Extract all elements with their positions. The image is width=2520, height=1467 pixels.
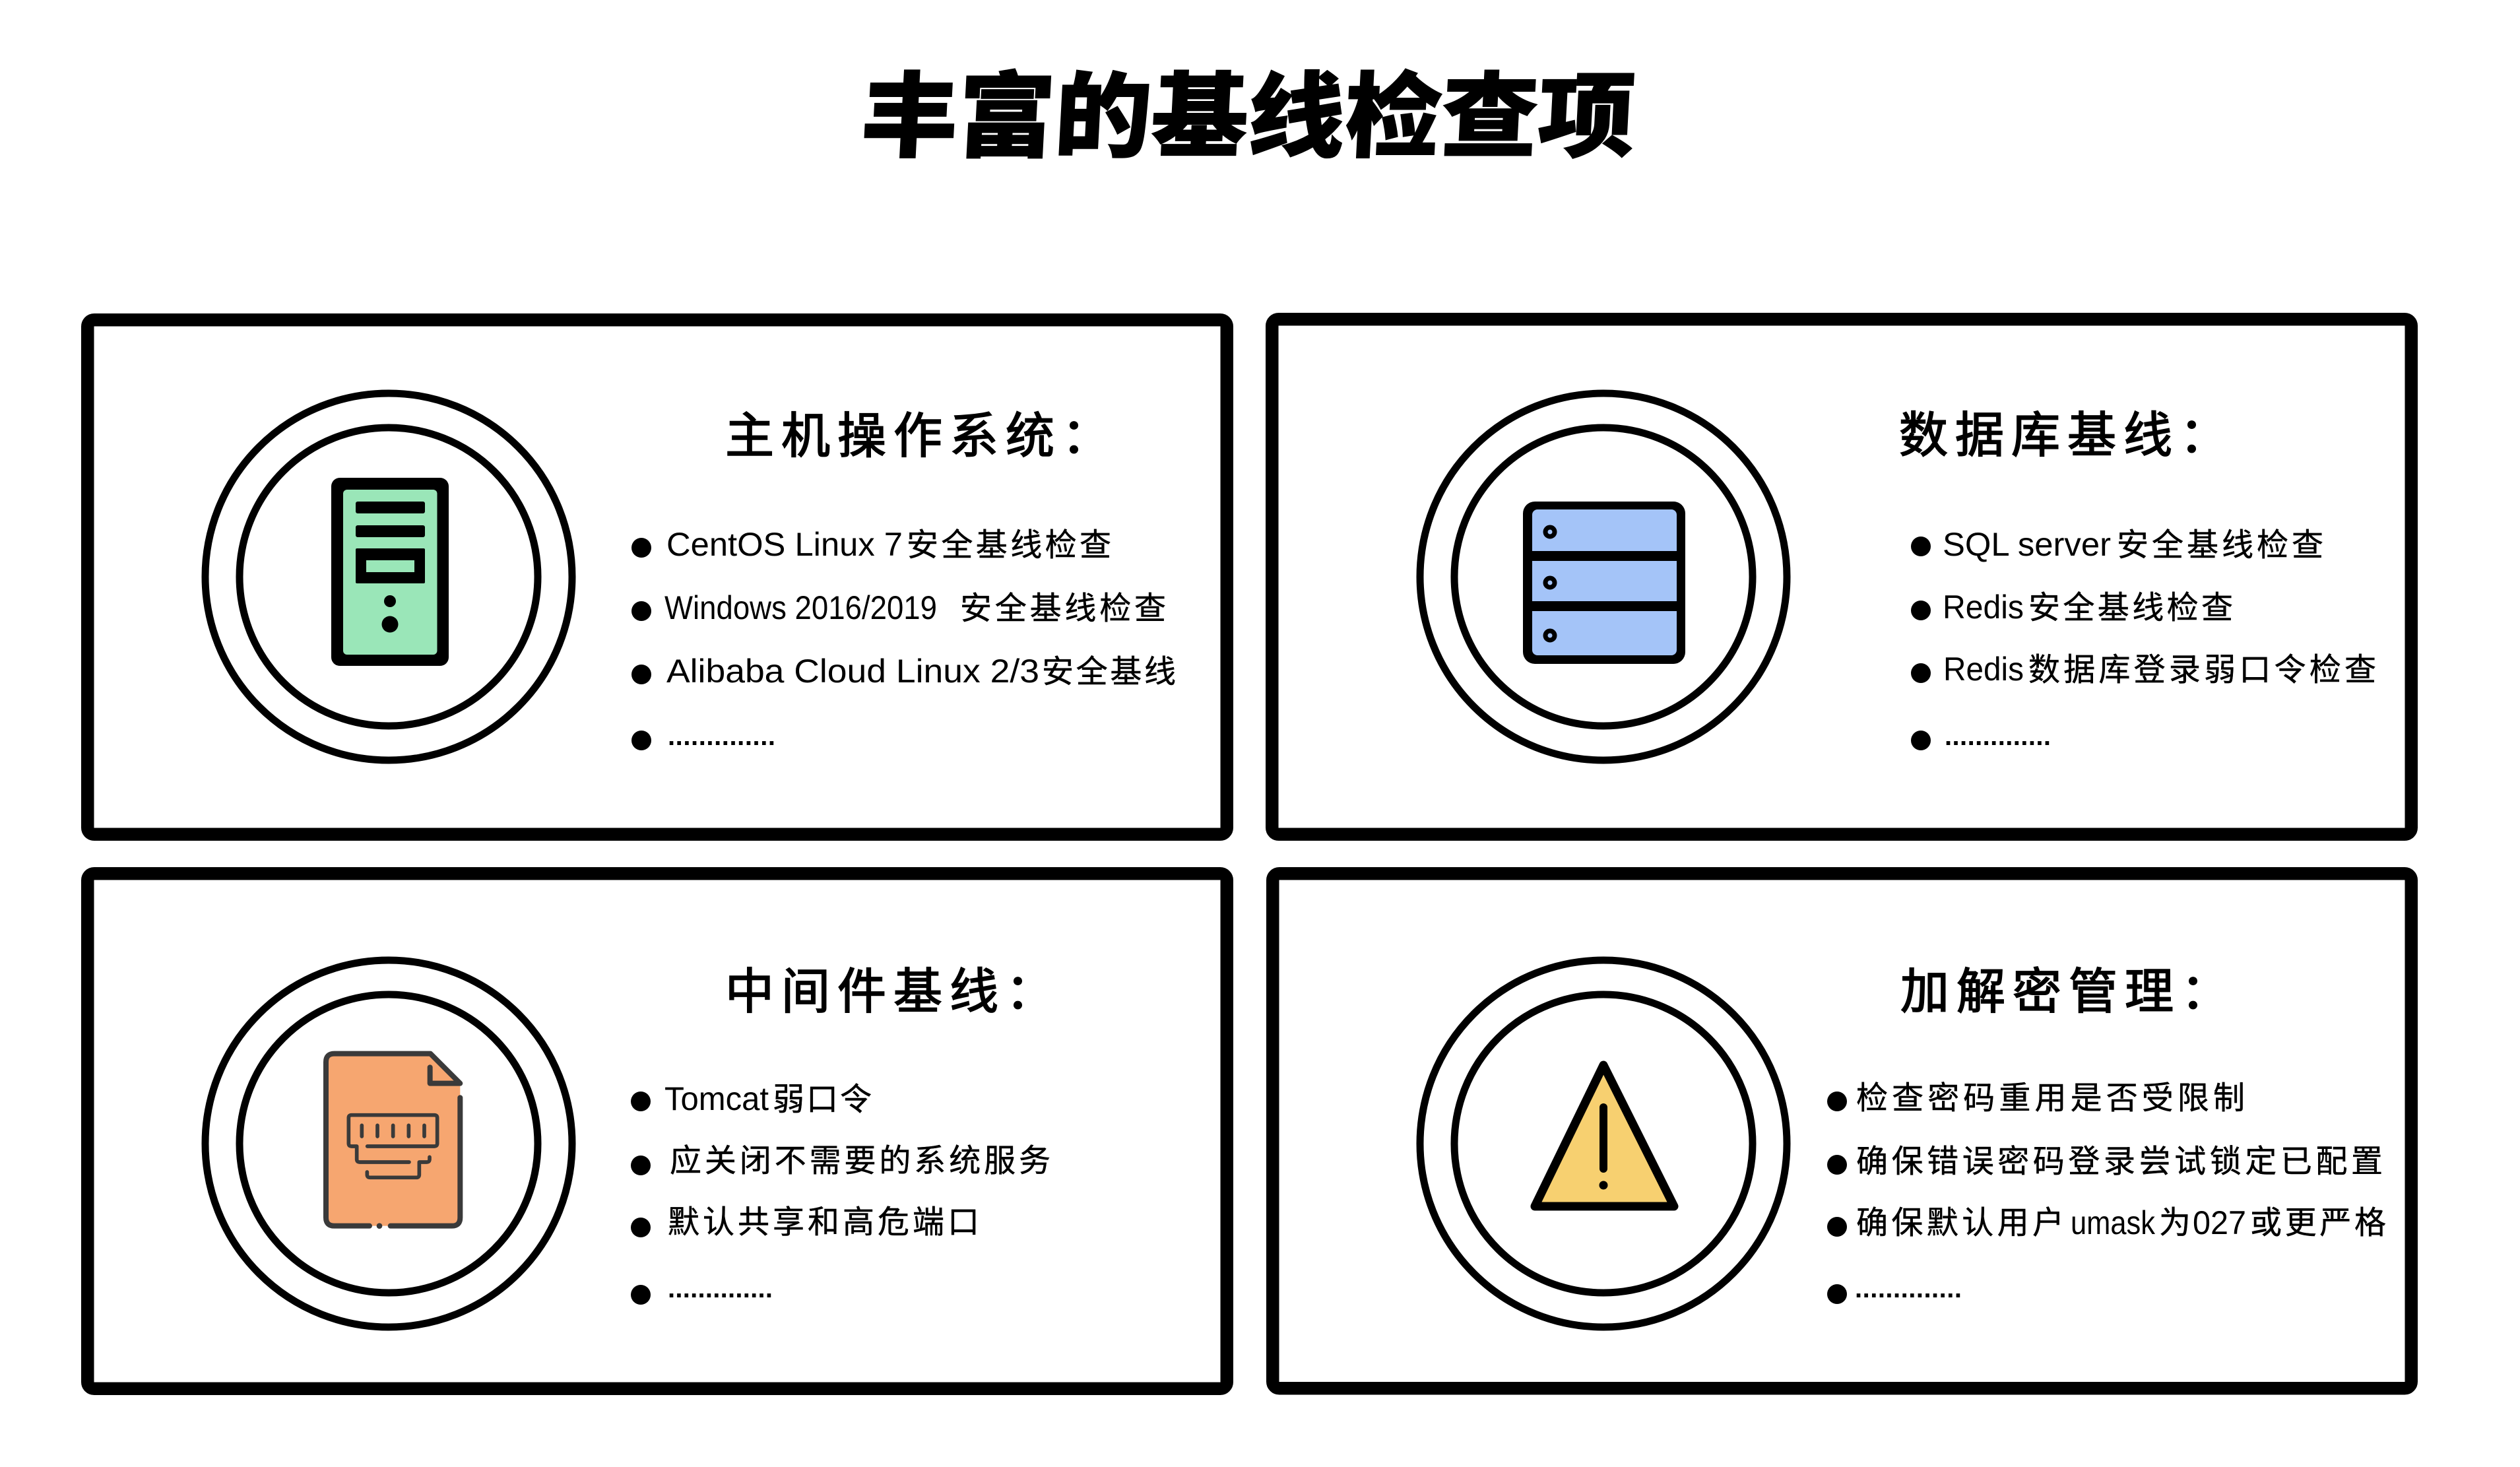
icon: computer tower bbox=[331, 478, 449, 666]
list item: Tomcat: Tomcat bbox=[664, 1080, 769, 1117]
list item: more: .............. bbox=[1945, 722, 2051, 751]
list item: SQL server bbox=[1911, 526, 2323, 563]
list item: more: .............. bbox=[668, 722, 775, 751]
list item: Redis weak password: Redis bbox=[1943, 651, 2024, 688]
heading: 加解密管理： bbox=[1900, 964, 2237, 1019]
panel: database baseline bbox=[1272, 319, 2411, 834]
concentric rings bbox=[205, 960, 572, 1327]
list item: Alibaba Cloud Linux: 安全基线 bbox=[1042, 655, 1176, 690]
list item: Redis baseline: Redis bbox=[1943, 589, 2024, 626]
panel: encryption management bbox=[1273, 874, 2411, 1388]
list item: umask: umask bbox=[2071, 1204, 2156, 1241]
list item: Redis baseline: 安全基线检查 bbox=[2028, 591, 2233, 626]
concentric rings bbox=[205, 393, 572, 760]
list item: CentOS: 安全基线检查 bbox=[907, 528, 1111, 563]
list item: Alibaba Cloud Linux bbox=[631, 653, 1176, 690]
list item: umask: 027 bbox=[2193, 1204, 2246, 1241]
concentric rings bbox=[1420, 960, 1787, 1327]
list item: SQL server: SQL server bbox=[1943, 526, 2111, 563]
list item: password reuse: 检查密码重用是否受限制 bbox=[1856, 1081, 2245, 1116]
list item: Windows bbox=[631, 589, 1166, 626]
list item: umask: 确保默认用户 bbox=[1856, 1206, 2064, 1241]
heading: 数据库基线： bbox=[1899, 408, 2236, 463]
list item: login lockout: 确保错误密码登录尝试锁定已配置 bbox=[1856, 1144, 2383, 1179]
list item: default shares and ports: 默认共享和高危端口 bbox=[668, 1205, 979, 1240]
heading: 中间件基线： bbox=[725, 964, 1062, 1019]
list item: Alibaba Cloud Linux: Alibaba Cloud Linux 2/3 bbox=[666, 653, 1039, 690]
list item: CentOS bbox=[631, 526, 1111, 563]
list item: Redis weak password: 数据库登录弱口令检查 bbox=[2028, 653, 2376, 688]
list item: Windows: Windows 2016/2019 bbox=[664, 589, 937, 626]
concentric rings bbox=[1420, 393, 1787, 760]
list item: umask bbox=[1827, 1204, 2386, 1241]
list item: Windows: 安全基线检查 bbox=[960, 591, 1166, 626]
panel: middleware baseline bbox=[88, 874, 1227, 1388]
list item: more: .............. bbox=[1855, 1274, 1962, 1303]
list item: umask: 或更严格 bbox=[2250, 1206, 2386, 1241]
list item: Redis baseline bbox=[1911, 589, 2233, 626]
list item: more: .............. bbox=[668, 1274, 773, 1303]
list item: disable unneeded services: 应关闭不需要的系统服务 bbox=[670, 1144, 1050, 1179]
icon: database server bbox=[1523, 502, 1685, 664]
heading: 主机操作系统： bbox=[725, 408, 1118, 463]
list item: umask: 为 bbox=[2159, 1206, 2191, 1241]
list item: Tomcat bbox=[631, 1080, 872, 1117]
icon: warning triangle bbox=[1535, 1065, 1674, 1206]
panel: host operating system bbox=[88, 320, 1227, 834]
list item: CentOS: CentOS Linux 7 bbox=[666, 526, 903, 563]
icon: document with network port bbox=[326, 1054, 460, 1229]
list item: Tomcat: 弱口令 bbox=[773, 1082, 872, 1117]
list item: SQL server: 安全基线检查 bbox=[2117, 528, 2323, 563]
title: 丰富的基线检查项 bbox=[858, 65, 1638, 169]
